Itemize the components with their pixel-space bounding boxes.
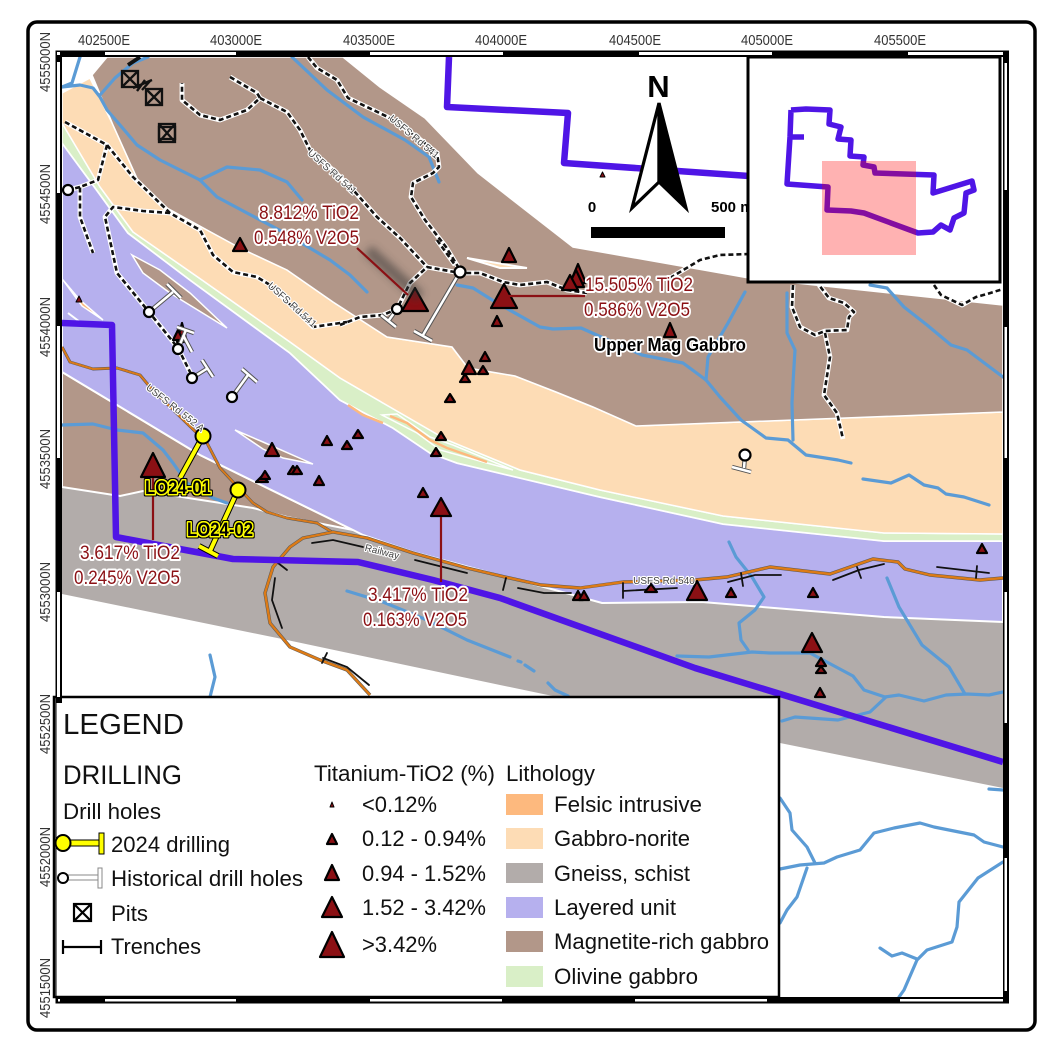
road labels: USFS Rd 540 <box>633 576 695 587</box>
drilling legend: Trenches <box>111 934 201 959</box>
northing axis labels: 4554500N <box>38 164 54 224</box>
lithology: magnetite-rich gabbro <box>92 57 1003 426</box>
easting axis labels: 404000E <box>475 33 527 49</box>
drill label LO24-01: LO24-01 <box>145 478 211 499</box>
easting axis labels: 402500E <box>78 33 130 49</box>
lithology: layered unit <box>62 143 1003 622</box>
assay label 2: 15.505% TiO2 <box>585 274 693 296</box>
northing axis labels: 4552500N <box>38 694 54 754</box>
northing axis labels: 4554000N <box>38 297 54 357</box>
road labels: USFS Rd 552 A <box>143 382 206 435</box>
road labels <box>143 113 695 587</box>
sample triangles <box>76 172 987 697</box>
easting axis labels: 403000E <box>210 33 262 49</box>
titanium legend <box>314 761 495 957</box>
north arrow: N <box>647 69 670 104</box>
assay label 3 <box>74 542 180 589</box>
titanium legend: <0.12% <box>362 792 437 817</box>
drilling legend: DRILLING <box>63 760 182 790</box>
assay label 3: 3.617% TiO2 <box>80 542 180 564</box>
drilling legend: 2024 drilling <box>111 832 230 857</box>
drilling legend: Historical drill holes <box>111 866 303 891</box>
lithology legend: Lithology <box>506 761 595 786</box>
lithology legend: Gabbro-norite <box>554 826 690 851</box>
inset locator map <box>748 57 1000 282</box>
easting axis labels: 403500E <box>343 33 395 49</box>
lithology legend: Olivine gabbro <box>554 964 698 989</box>
assay label 4: 3.417% TiO2 <box>368 584 468 606</box>
road labels: USFS Rd 541 <box>265 281 319 330</box>
assay label 2 <box>584 274 693 321</box>
lithology legend: Layered unit <box>554 895 676 920</box>
scale bar <box>588 202 746 238</box>
northing axis labels: 4552000N <box>38 827 54 887</box>
titanium legend: 1.52 - 3.42% <box>362 895 486 920</box>
rivers <box>62 57 1003 997</box>
scale bar: 0 <box>588 199 596 216</box>
property boundary <box>62 57 1003 762</box>
north arrow <box>632 69 686 208</box>
titanium legend: Titanium-TiO2 (%) <box>314 761 495 786</box>
lithology: gabbro-norite <box>62 78 1003 534</box>
road labels: USFS Rd 541 <box>387 113 441 162</box>
upper mag gabbro label: Upper Mag Gabbro <box>594 335 746 355</box>
inset: study area rectangle <box>822 161 916 255</box>
easting axis labels: 405500E <box>874 33 926 49</box>
lithology legend <box>506 761 769 989</box>
dashed forest roads <box>65 57 1003 439</box>
lithology legend: Gneiss, schist <box>554 861 690 886</box>
titanium legend: 0.94 - 1.52% <box>362 861 486 886</box>
titanium legend: 0.12 - 0.94% <box>362 826 486 851</box>
2024 drill holes <box>180 428 246 556</box>
leader lines with shadows <box>153 248 585 582</box>
road labels: USFS Rd 541 <box>305 148 359 197</box>
easting axis labels: 405000E <box>741 33 793 49</box>
legend panel <box>54 697 779 997</box>
assay label 4: 0.163% V2O5 <box>363 609 467 631</box>
lenses: brown and felsic slivers <box>63 255 527 470</box>
northing axis labels: 4553000N <box>38 562 54 622</box>
lithology legend: Felsic intrusive <box>554 792 702 817</box>
assay label 2: 0.586% V2O5 <box>584 299 690 321</box>
railway and trenches <box>272 540 989 685</box>
assay label 1: 8.812% TiO2 <box>259 202 359 224</box>
drilling legend: Drill holes <box>63 799 161 824</box>
northing axis labels: 4553500N <box>38 429 54 489</box>
drilling legend: Pits <box>111 901 148 926</box>
drill label LO24-02: LO24-02 <box>187 520 253 541</box>
symbol: historical drill holes <box>58 868 102 888</box>
orange roads <box>62 347 1003 695</box>
assay label 1: 0.548% V2O5 <box>254 227 359 249</box>
assay label 3: 0.245% V2O5 <box>74 567 180 589</box>
lithology: gneiss, schist <box>62 487 1003 788</box>
legend title: LEGEND <box>63 709 184 741</box>
northing axis labels: 4551500N <box>38 958 54 1018</box>
map: geology and features <box>62 57 1003 997</box>
road labels: Railway <box>364 543 400 562</box>
titanium legend: >3.42% <box>362 932 437 957</box>
symbol: pits <box>74 904 91 921</box>
northing axis labels <box>38 32 54 1018</box>
symbol: 2024 drilling <box>56 833 104 854</box>
easting axis labels <box>78 33 926 49</box>
northing axis labels: 4555000N <box>38 32 54 92</box>
easting axis labels: 404500E <box>609 33 661 49</box>
lithology: magnetite gabbro south <box>62 372 353 530</box>
lithology legend: Magnetite-rich gabbro <box>554 929 769 954</box>
map background <box>62 57 1003 997</box>
assay label 1 <box>254 202 359 249</box>
assay label 4 <box>363 584 468 631</box>
lithology: olivine gabbro <box>62 123 1003 541</box>
symbol: trenches <box>63 940 101 954</box>
pits <box>122 57 175 142</box>
drilling legend <box>56 760 303 959</box>
scale bar: 500 m <box>711 199 754 216</box>
historical drill holes <box>63 185 751 472</box>
inset: property outline <box>787 109 974 233</box>
